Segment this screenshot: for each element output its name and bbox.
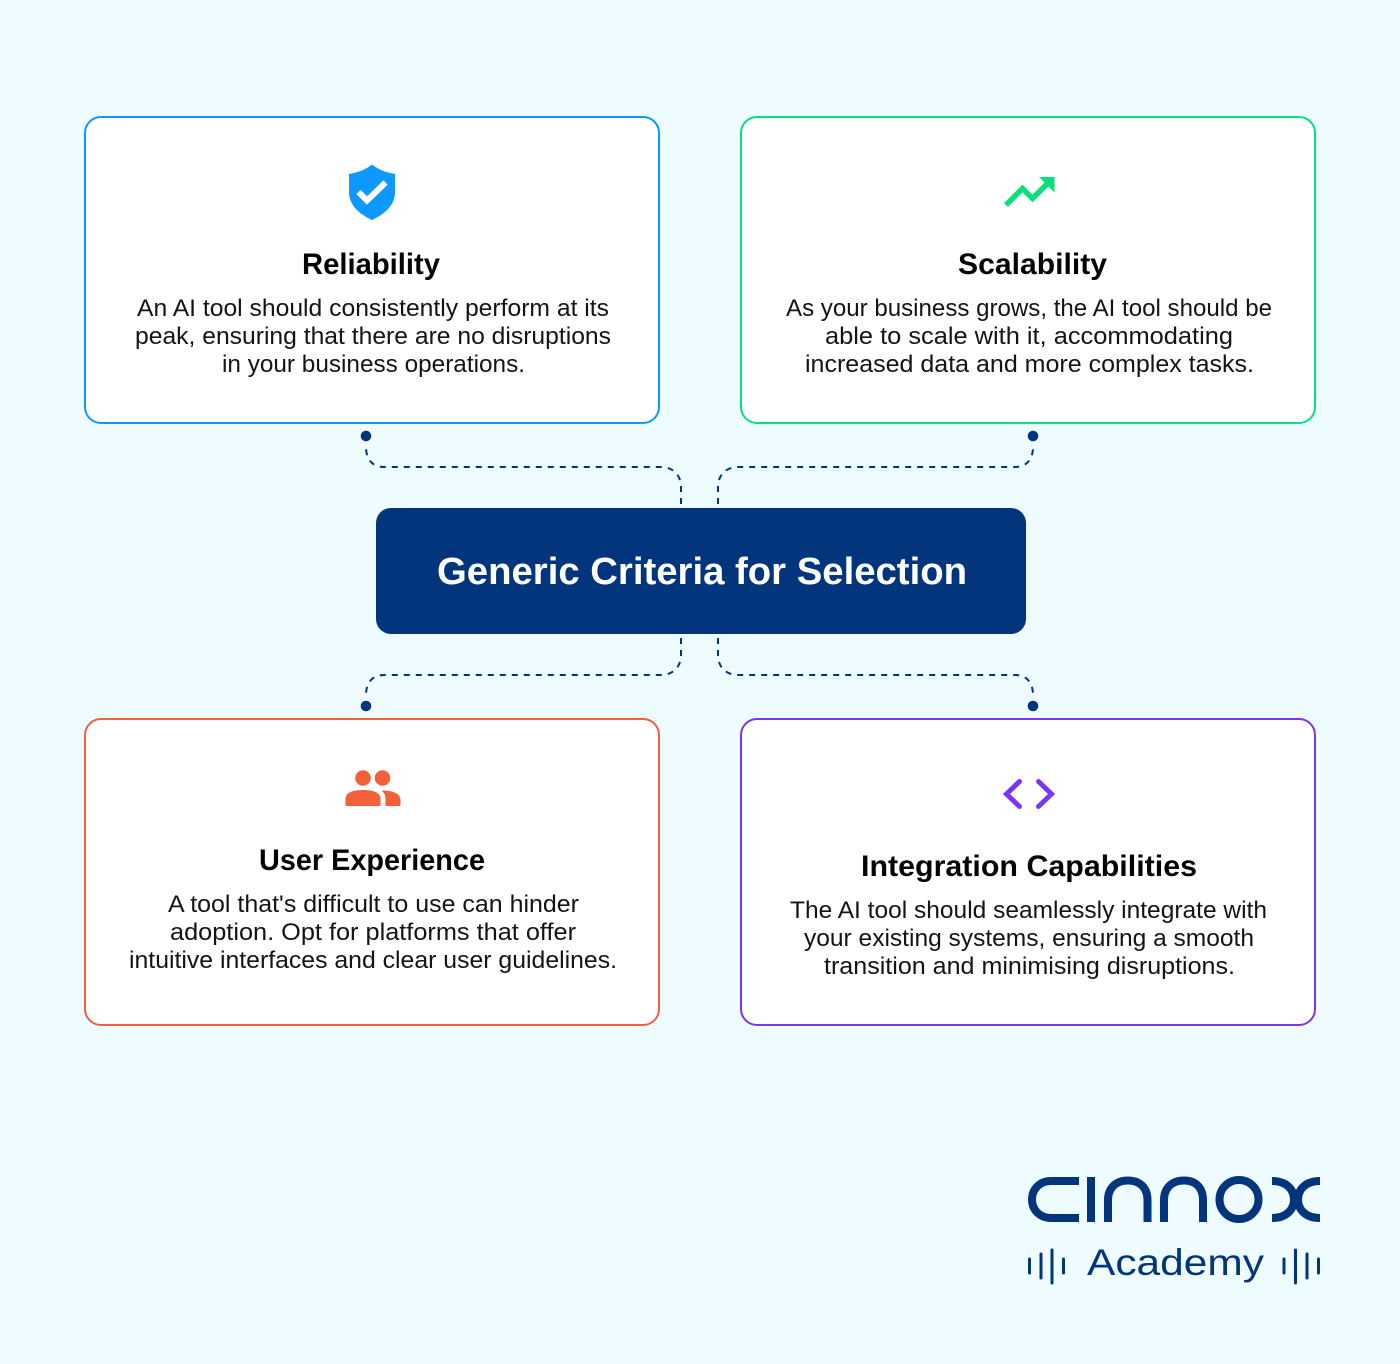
connector: user experience to centre [361, 638, 681, 711]
logo: cinnox academy [1030, 1177, 1320, 1283]
text: scalability description: As your business grows, the AI tool should be [786, 295, 1272, 322]
text: integration description: The AI tool should seamlessly integrate with [790, 897, 1267, 924]
connector: integration to centre [718, 638, 1038, 711]
icon: two users [346, 770, 400, 806]
connector: scalability to centre [718, 431, 1038, 504]
text: reliability description: An AI tool should consistently perform at its [137, 295, 609, 322]
logo: left sound wave [1030, 1250, 1064, 1283]
connector: reliability to centre [361, 431, 681, 504]
text: integration description: transition and minimising disruptions. [824, 953, 1235, 980]
text: reliability description: peak, ensuring that there are no disruptions [135, 323, 611, 350]
text: scalability description [786, 295, 1272, 378]
logo: academy label: Academy [1087, 1242, 1265, 1283]
panel: reliability [85, 117, 659, 423]
heading: integration capabilities: Integration Capabilities [861, 850, 1197, 883]
icon: code brackets [1006, 782, 1052, 806]
heading: scalability: Scalability [958, 248, 1107, 281]
central title box [376, 508, 1026, 634]
heading: reliability: Reliability [302, 248, 440, 281]
text: scalability description: able to scale with it, accommodating [825, 323, 1233, 350]
logo wordmark [1032, 1177, 1320, 1222]
text: user experience description [129, 891, 617, 974]
panel: scalability [741, 117, 1315, 423]
panel: user experience [85, 719, 659, 1025]
text: integration description: your existing systems, ensuring a smooth [804, 925, 1254, 952]
text: scalability description: increased data and more complex tasks. [805, 351, 1254, 378]
icon: shield with check [349, 164, 395, 220]
text: integration description [790, 897, 1267, 980]
text: user experience description: intuitive interfaces and clear user guidelines. [129, 947, 617, 974]
text: reliability description [135, 295, 611, 378]
logo: right sound wave [1284, 1250, 1318, 1283]
panel: integration capabilities [741, 719, 1315, 1025]
text: user experience description: adoption. Opt for platforms that offer [170, 919, 576, 946]
icon: trending up arrow [1006, 177, 1054, 205]
text: reliability description: in your business operations. [222, 351, 525, 378]
heading: user experience: User Experience [259, 844, 485, 877]
text: user experience description: A tool that's difficult to use can hinder [168, 891, 579, 918]
title: Generic Criteria for Selection [437, 551, 967, 593]
